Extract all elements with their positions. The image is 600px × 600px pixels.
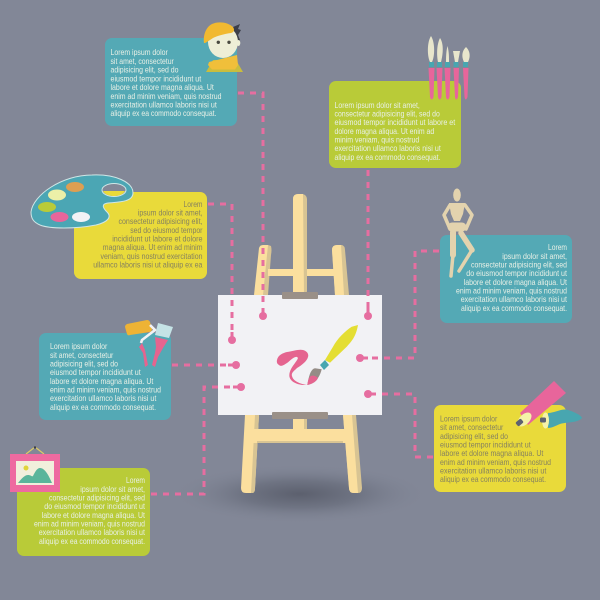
- panel: palette: Lorem: [184, 199, 202, 209]
- panel: frame: labore et dolore magna aliqua. Ut: [42, 510, 145, 520]
- panel: tubes: [434, 405, 566, 492]
- panel: palette: magna aliqua. Ut enim ad minim: [103, 242, 202, 252]
- panel: brushes: minim veniam, quis nostrud: [334, 134, 419, 144]
- panel: frame: exercitation ullamco laboris nisi ut: [39, 527, 145, 537]
- paintbrush on canvas: [307, 325, 358, 385]
- icon: palette: [31, 175, 133, 228]
- easel: [241, 194, 362, 493]
- canvas: [218, 295, 382, 415]
- panel: artist: eiusmod tempor incididunt ut: [110, 73, 202, 83]
- panel: tubes: labore et dolore magna aliqua. Ut: [440, 448, 544, 458]
- panel: palette: incididunt ut labore et dolore: [112, 234, 203, 244]
- icon: framed picture: [10, 446, 60, 492]
- top clamp: [282, 292, 318, 299]
- connector: tubes to canvas: [364, 390, 433, 457]
- panel: artist: aliquip ex ea commodo consequat.: [110, 108, 216, 118]
- panel: tubes: aliquip ex ea commodo consequat.: [440, 474, 546, 484]
- icon: paint tubes: [515, 381, 582, 429]
- panel: palette: ipsum dolor sit amet,: [138, 208, 202, 218]
- panel: frame: consectetur adipisicing elit, sed: [49, 492, 145, 502]
- panel: palette: sed do eiusmod tempor: [130, 225, 203, 235]
- icon: brushes: [428, 36, 470, 100]
- panel: mannequin: aliquip ex ea commodo consequat.: [461, 303, 567, 313]
- panel: brushes: Lorem ipsum dolor sit amet,: [334, 100, 420, 110]
- panel: mannequin: consectetur adipisicing elit, sed: [471, 260, 567, 270]
- panel: mannequin: [440, 235, 572, 323]
- panel: brushes: dolore magna aliqua. Ut enim ad: [334, 126, 434, 136]
- panel: rollers: [39, 333, 171, 420]
- panel: rollers: Lorem ipsum dolor: [50, 341, 107, 351]
- panel: frame: enim ad minim veniam, quis nostrud: [34, 518, 145, 528]
- panel: tubes: eiusmod tempor incididunt ut: [440, 440, 531, 450]
- connector: artist to canvas: [238, 93, 267, 320]
- easel shadow: [170, 464, 430, 524]
- panel: palette: veniam, quis nostrud exercitation: [100, 251, 203, 261]
- panel: brushes: aliquip ex ea commodo consequat.: [334, 152, 440, 162]
- panel: tubes: Lorem ipsum dolor: [440, 414, 497, 424]
- panel: artist: [105, 38, 237, 126]
- panel: tubes: adipisicing elit, sed do: [440, 431, 508, 441]
- panel: mannequin: Lorem: [548, 242, 567, 252]
- panel: tubes: sit amet, consectetur: [440, 422, 503, 432]
- bottom clamp: [272, 412, 328, 419]
- icon: mannequin: [444, 188, 472, 276]
- panel: frame: aliquip ex ea commodo consequat.: [39, 536, 145, 546]
- panel: brushes: exercitation ullamco laboris nisi ut: [334, 143, 441, 153]
- panel: mannequin: do eiusmod tempor incididunt ut: [466, 268, 567, 278]
- panel: rollers: enim ad minim veniam, quis nostrud: [50, 384, 161, 394]
- panel: mannequin: enim ad minim veniam, quis nostrud: [456, 286, 567, 296]
- panel: artist: labore et dolore magna aliqua. Ut: [110, 82, 214, 92]
- panel: palette: consectetur adipisicing elit,: [118, 216, 202, 226]
- panel: rollers: aliquip ex ea commodo consequat.: [50, 402, 156, 412]
- connector: frame to canvas: [151, 383, 245, 494]
- connector: mannequin to canvas: [356, 251, 439, 362]
- connector: palette to canvas: [208, 204, 236, 344]
- panel: rollers: adipisicing elit, sed do: [50, 358, 118, 368]
- panel: artist: enim ad minim veniam, quis nostrud: [110, 91, 222, 101]
- connector: brushes to canvas: [364, 170, 372, 320]
- panel: rollers: eiusmod tempor incididunt ut: [50, 367, 141, 377]
- panel: artist: Lorem ipsum dolor: [110, 47, 168, 57]
- icon: roller and brush: [125, 320, 173, 367]
- icon: artist: [204, 22, 243, 72]
- panel: tubes: exercitation ullamco laboris nisi ut: [440, 466, 547, 476]
- panel: brushes: eiusmod tempor incididunt ut labore et: [334, 117, 456, 127]
- panel: artist: sit amet, consectetur: [110, 56, 174, 66]
- panel: mannequin: exercitation ullamco laboris nisi ut: [461, 294, 567, 304]
- panel: frame: [17, 468, 150, 556]
- panel: tubes: enim ad minim veniam, quis nostrud: [440, 457, 551, 467]
- brush stroke on canvas: [277, 350, 308, 385]
- connector: rollers to canvas: [172, 361, 240, 369]
- panel: frame: do eiusmod tempor incididunt ut: [44, 501, 145, 511]
- panel: artist: adipisicing elit, sed do: [110, 65, 179, 75]
- panel: artist: exercitation ullamco laboris nisi ut: [110, 100, 217, 110]
- panel: rollers: sit amet, consectetur: [50, 350, 113, 360]
- panel: frame: ipsum dolor sit amet,: [80, 484, 145, 494]
- panel: rollers: labore et dolore magna aliqua. Ut: [50, 376, 154, 386]
- panel: mannequin: ipsum dolor sit amet,: [502, 251, 567, 261]
- panel: brushes: consectetur adipisicing elit, sed do: [334, 108, 440, 118]
- panel: palette: ullamco laboris nisi ut aliquip ex ea: [93, 260, 203, 270]
- panel: frame: Lorem: [126, 475, 145, 485]
- panel: mannequin: labore et dolore magna aliqua. Ut: [464, 277, 567, 287]
- panel: brushes: [329, 81, 461, 168]
- panel: palette: [74, 192, 207, 279]
- panel: rollers: exercitation ullamco laboris nisi ut: [50, 393, 157, 403]
